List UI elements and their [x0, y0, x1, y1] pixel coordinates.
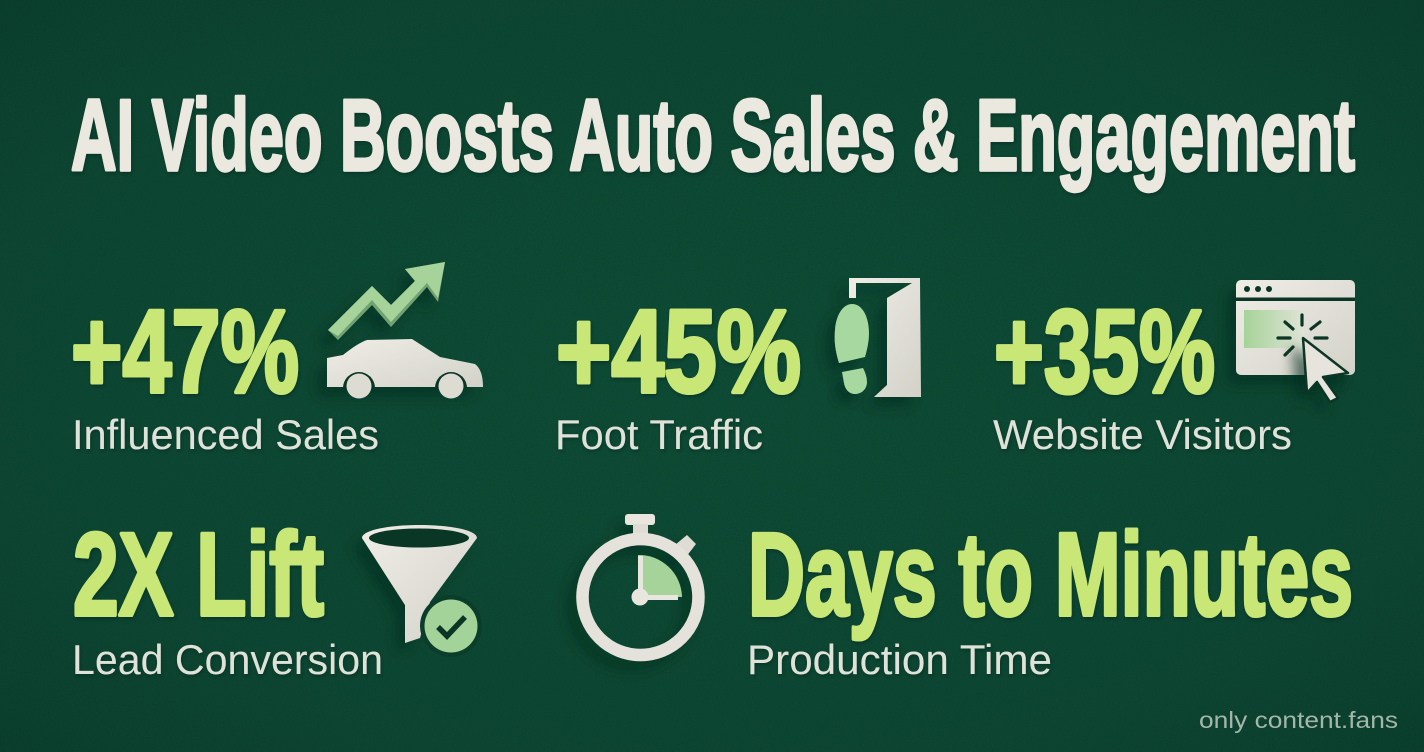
- stat: influenced sales: [71, 262, 483, 458]
- stat: production time: [582, 509, 1353, 683]
- icon: browser window with cursor: [1236, 280, 1355, 402]
- number: +47%: +47%: [71, 286, 299, 418]
- watermark: only content.fans: [1199, 707, 1398, 733]
- icon: rising arrow and car: [327, 262, 483, 398]
- number: +45%: +45%: [556, 286, 801, 418]
- icon: funnel with check: [362, 525, 482, 657]
- icon: stopwatch: [582, 514, 698, 655]
- label: Foot Traffic: Foot Traffic: [555, 411, 763, 458]
- label: Influenced Sales: Influenced Sales: [72, 411, 379, 458]
- stat: lead conversion: [72, 509, 482, 683]
- label: Website Visitors: Website Visitors: [993, 411, 1292, 458]
- icon: door and footprint: [835, 278, 921, 397]
- stat: foot traffic: [555, 278, 921, 458]
- label: Lead Conversion: Lead Conversion: [72, 636, 383, 683]
- number: 2X Lift: 2X Lift: [73, 509, 324, 641]
- number: +35%: +35%: [994, 286, 1215, 418]
- stat: website visitors: [993, 280, 1355, 458]
- label: Production Time: Production Time: [747, 636, 1052, 683]
